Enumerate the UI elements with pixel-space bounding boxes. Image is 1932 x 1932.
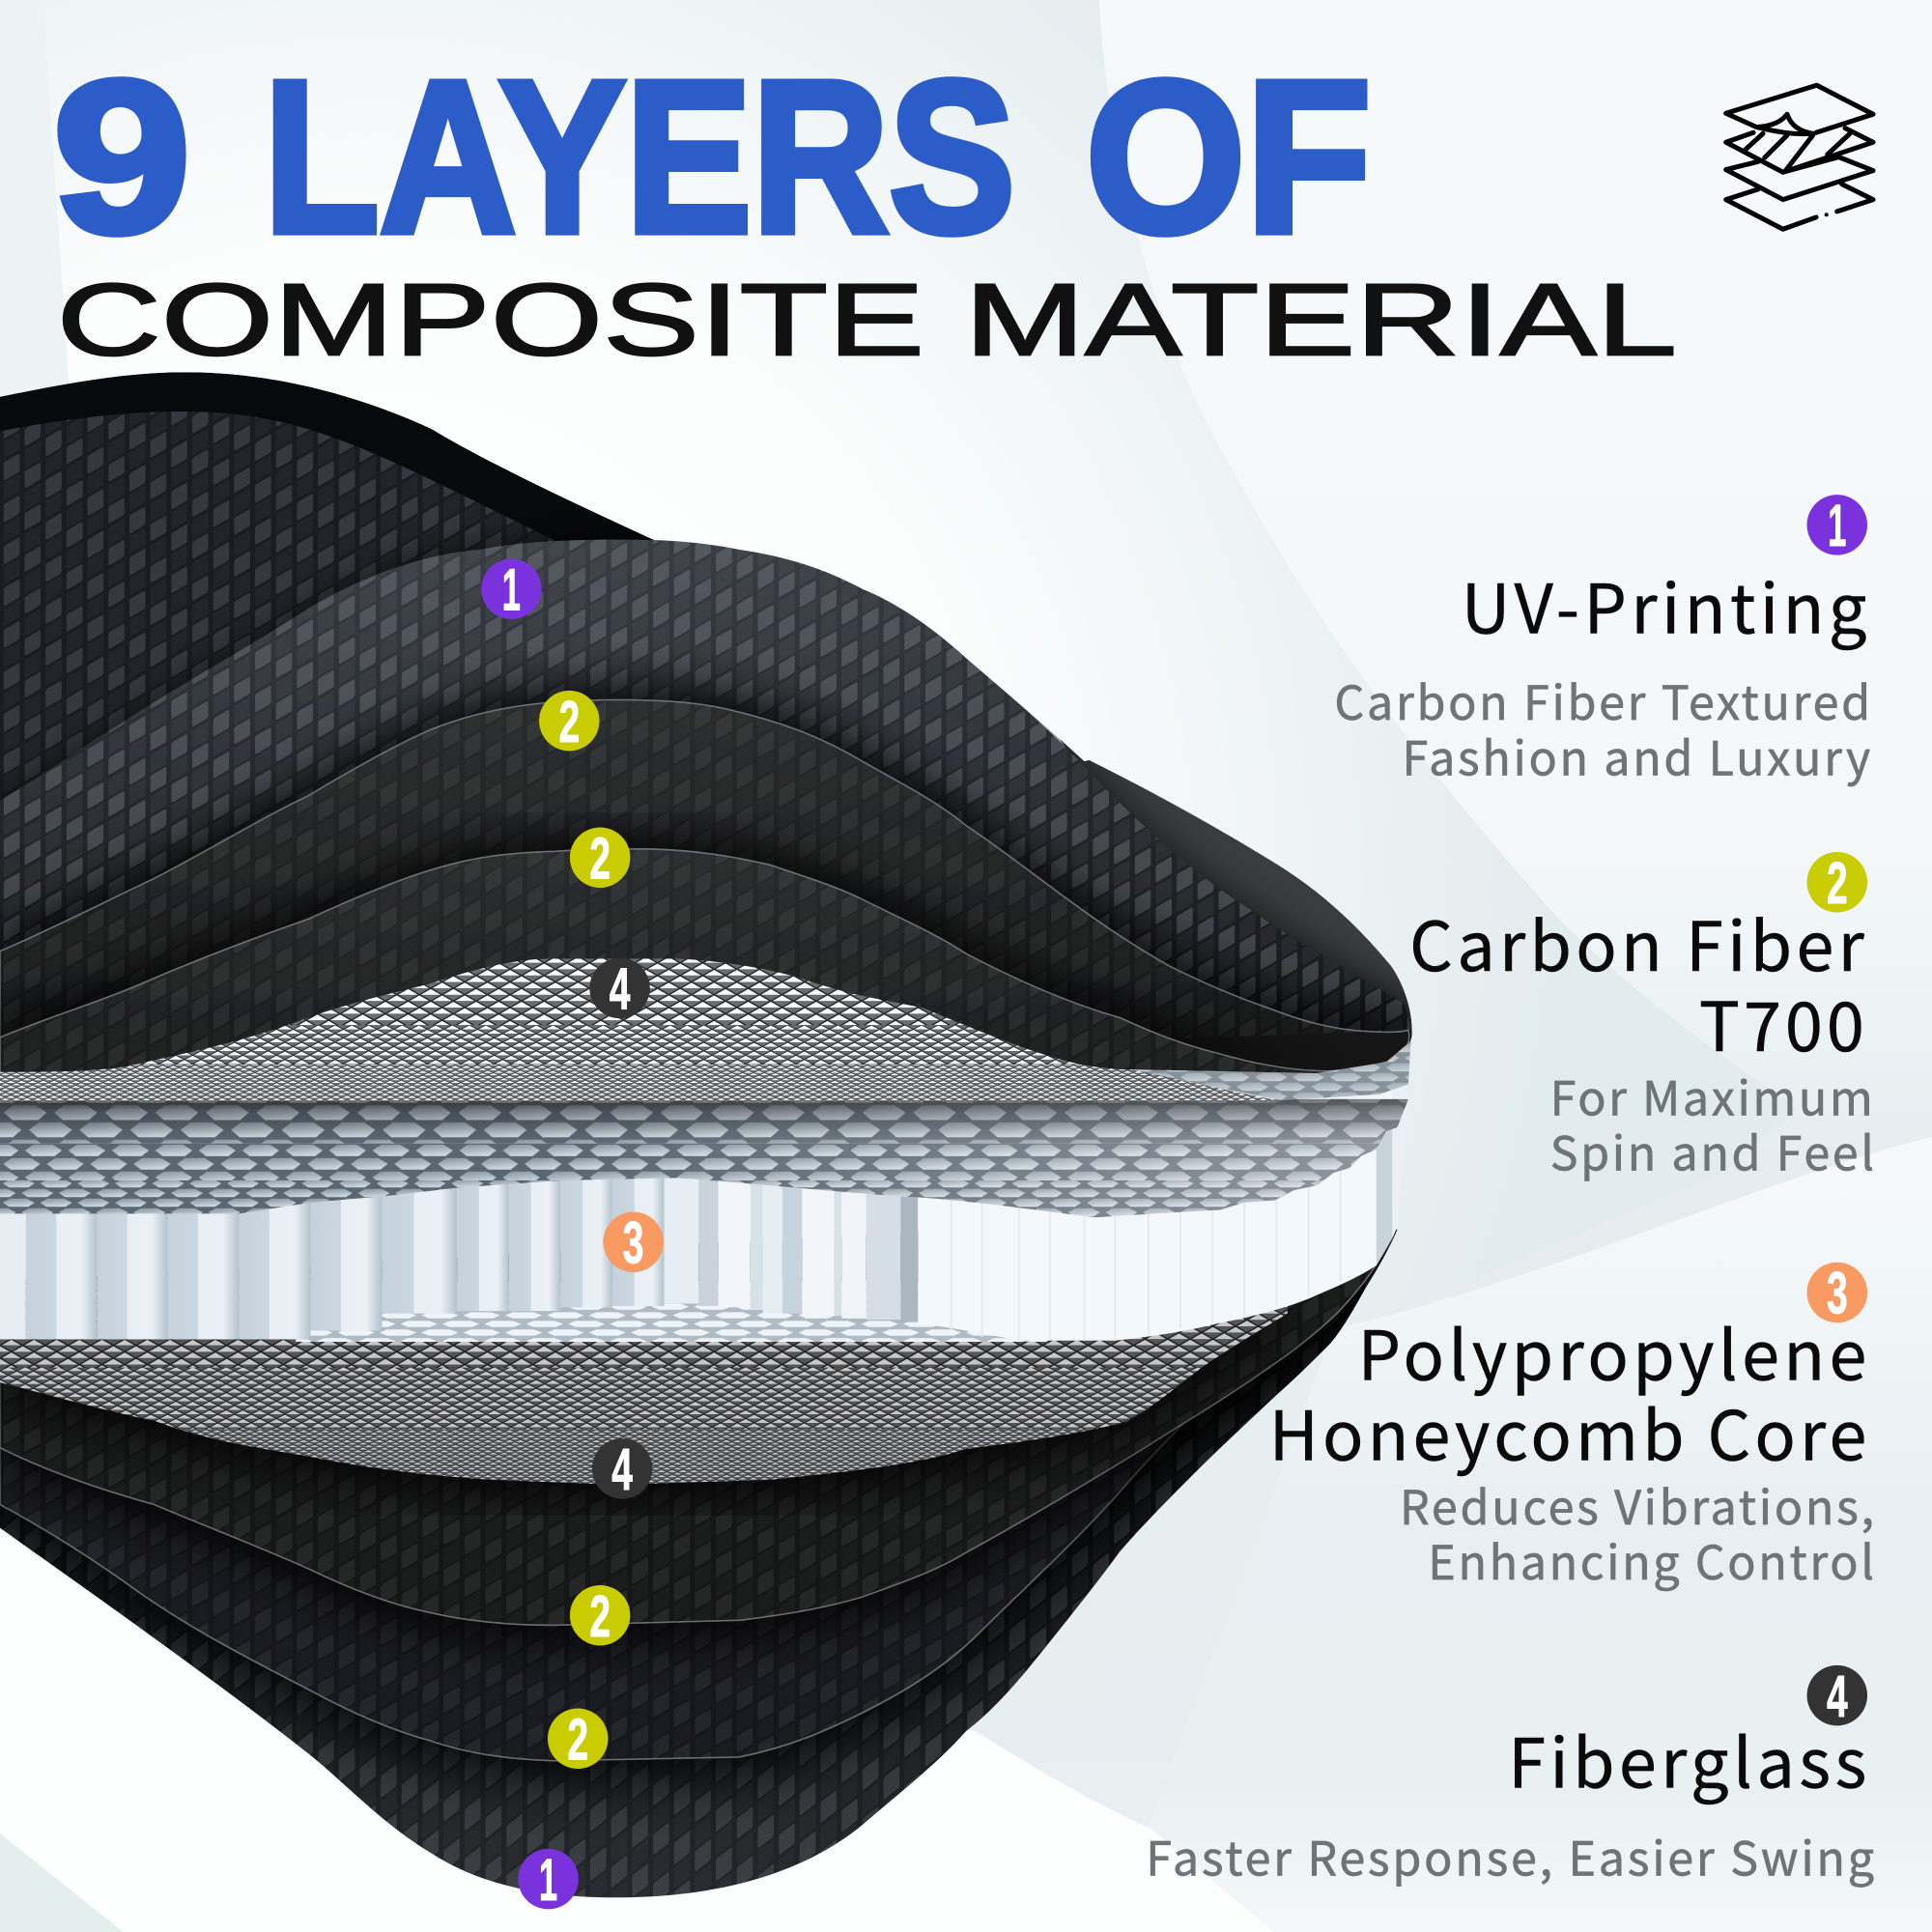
description: Carbon Fiber T700: Spin and Feel bbox=[1550, 1117, 1874, 1184]
upper honeycomb band bbox=[0, 1096, 1417, 1220]
upper carbon layers, shaded and clipped to the silhouette bbox=[0, 372, 1412, 1091]
carbon fiber layer A bbox=[0, 699, 1409, 1084]
badge: 3 core: 3 bbox=[623, 1209, 643, 1275]
badge: 2 second: 2 bbox=[589, 825, 611, 891]
badge: 3 core bbox=[603, 1209, 664, 1275]
lower carbon layers, shaded and clipped to the silhouette bbox=[0, 1208, 1392, 1761]
bottom outer carbon layer bbox=[0, 1208, 1397, 1897]
heading: Polypropylene Honeycomb Core: Polypropylene bbox=[1358, 1303, 1866, 1401]
description: UV-Printing: Fashion and Luxury bbox=[1403, 721, 1870, 788]
badge: 2 second bbox=[570, 825, 630, 891]
badge: 1 top: 1 bbox=[502, 556, 521, 622]
badge: 2 lower: 2 bbox=[589, 1583, 611, 1649]
description: Polypropylene bbox=[1400, 1470, 1874, 1593]
legend badge 4: 4 bbox=[1827, 1663, 1848, 1729]
honeycomb core walls bbox=[0, 1090, 1409, 1341]
description: UV-Printing: Carbon Fiber Textured bbox=[1334, 666, 1870, 733]
icon: stacked layers bbox=[1726, 85, 1873, 229]
badge: 1 top bbox=[481, 556, 542, 622]
lower honeycomb cells bbox=[296, 1282, 1047, 1342]
layer stack illustration bbox=[0, 372, 1417, 1897]
legend badge 2: 2 bbox=[1827, 850, 1848, 916]
legend badge 4 bbox=[1807, 1663, 1867, 1729]
badge: 2 upper bbox=[539, 689, 600, 754]
bottom carbon layer 1 bbox=[0, 1208, 1392, 1625]
panel: Fiberglass legend bbox=[1146, 1663, 1874, 1889]
legend badge 2 bbox=[1807, 850, 1867, 916]
description: Carbon Fiber T700 bbox=[1550, 1061, 1874, 1184]
top carbon layer: UV printing bbox=[0, 540, 1412, 1084]
description: Fiberglass: Faster Response, Easier Swing bbox=[1146, 1821, 1874, 1889]
heading: UV-Printing: UV-Printing bbox=[1462, 556, 1866, 654]
description: Polypropylene: Enhancing Control bbox=[1428, 1525, 1874, 1593]
badge: 2 upper: 2 bbox=[558, 689, 580, 754]
bottom carbon layer 2 bbox=[0, 1208, 1392, 1761]
heading: Carbon Fiber T700 bbox=[1409, 894, 1865, 1071]
legend badge 3 bbox=[1807, 1261, 1867, 1326]
heading: Carbon Fiber T700: T700 bbox=[1699, 974, 1864, 1071]
title: 9 layers of: LAYERS bbox=[264, 36, 1015, 278]
badge: 2 lowest: 2 bbox=[567, 1706, 588, 1772]
bottom fiberglass layer bbox=[0, 1269, 1306, 1491]
badge: 4 upper bbox=[589, 956, 650, 1022]
heading: Polypropylene Honeycomb Core: Honeycomb Core bbox=[1269, 1382, 1866, 1480]
legend badge 3: 3 bbox=[1827, 1261, 1848, 1326]
legend badge 1: 1 bbox=[1828, 493, 1846, 558]
title: 9 layers of bbox=[53, 36, 1372, 278]
badge: 1 bottom: 1 bbox=[539, 1847, 557, 1913]
description: Carbon Fiber T700: For Maximum bbox=[1550, 1061, 1873, 1128]
description: Polypropylene: Reduces Vibrations, bbox=[1400, 1470, 1874, 1538]
carbon fiber layer B bbox=[0, 849, 1386, 1091]
badge: 4 upper: 4 bbox=[610, 956, 630, 1022]
heading: Carbon Fiber T700: Carbon Fiber bbox=[1409, 894, 1865, 991]
upper fiberglass layer bbox=[0, 949, 1293, 1104]
back carbon sheet bbox=[0, 372, 1412, 1084]
subtitle: composite material: COMPOSITE MATERIAL bbox=[57, 263, 1677, 377]
shadow under bottom fiberglass bbox=[0, 1282, 1288, 1485]
title: 9 layers of: OF bbox=[1086, 36, 1372, 278]
title: 9 layers of: 9 bbox=[53, 36, 191, 278]
badge: 2 lowest bbox=[548, 1706, 608, 1772]
legend badge 1 bbox=[1807, 493, 1867, 558]
badge: 1 bottom bbox=[518, 1847, 579, 1913]
badge: 4 lower: 4 bbox=[611, 1436, 633, 1502]
glass edge of fiberglass layer bbox=[1130, 1041, 1410, 1100]
badge: 2 lower bbox=[570, 1583, 630, 1649]
panel: UV-Printing legend bbox=[1334, 493, 1870, 788]
heading: Polypropylene Honeycomb Core bbox=[1269, 1303, 1866, 1480]
panel: Carbon Fiber T700 legend bbox=[1409, 850, 1874, 1184]
description: UV-Printing bbox=[1334, 666, 1870, 788]
panel: Polypropylene legend bbox=[1269, 1261, 1874, 1593]
badge: 4 lower bbox=[592, 1436, 652, 1502]
heading: Fiberglass: Fiberglass bbox=[1508, 1711, 1866, 1808]
